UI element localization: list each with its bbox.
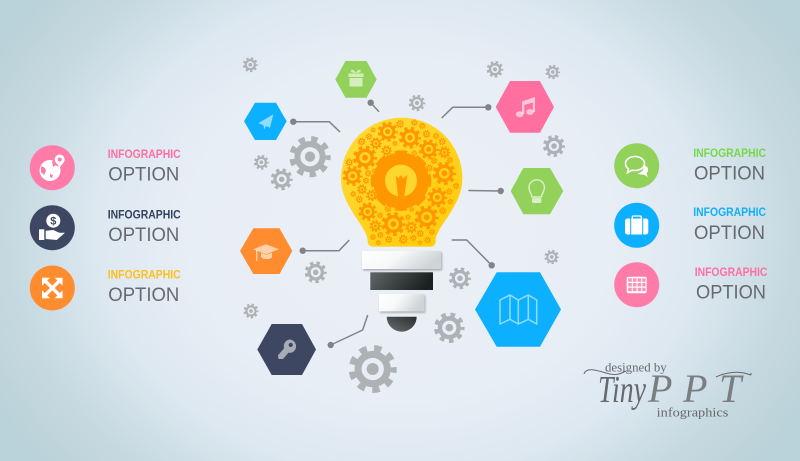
wordmark: designed by TinyPPT infographics: infographics (657, 405, 728, 420)
icon: key (278, 339, 296, 359)
icon: gift (348, 70, 364, 86)
icon: graduation cap (253, 244, 279, 261)
wordmark: designed by TinyPPT infographics: P (682, 366, 707, 411)
icon: hand and coin: $ (50, 216, 56, 228)
wordmark: designed by TinyPPT infographics (584, 360, 751, 420)
gray decorative gears (244, 58, 563, 390)
bulb glass with gears (341, 118, 462, 247)
right option 2 (614, 203, 766, 248)
label: OPTION (694, 222, 765, 244)
wordmark: designed by TinyPPT infographics: T (719, 366, 744, 411)
icon: chat bubbles (614, 143, 659, 188)
icon: globe and pin (30, 145, 75, 190)
label: INFOGRAPHIC (108, 149, 181, 161)
right option 1 (614, 143, 766, 188)
hexagon: graduation cap (240, 228, 292, 274)
label: INFOGRAPHIC (693, 207, 766, 219)
hexagon: light bulb (511, 168, 563, 214)
hexagon: key (257, 324, 316, 375)
label: OPTION (108, 164, 179, 186)
wordmark: designed by TinyPPT infographics: Tiny (598, 369, 646, 411)
hexagon: paper plane (244, 103, 287, 140)
right option 3 (614, 262, 767, 307)
label (693, 207, 766, 244)
hexagon: map (475, 272, 561, 347)
wordmark: designed by TinyPPT infographics: P (647, 366, 672, 411)
icon: hand and coin (30, 205, 75, 250)
connector lines (290, 100, 504, 348)
wordmark: designed by TinyPPT infographics: designed by (605, 360, 667, 374)
icon: plane (258, 114, 273, 129)
icon: bulb (529, 180, 544, 203)
label (108, 149, 181, 186)
hexagon: gift (335, 61, 377, 98)
icon: music note (516, 97, 535, 117)
label (108, 270, 181, 306)
label: OPTION (108, 284, 179, 306)
bulb base (362, 251, 441, 332)
label: INFOGRAPHIC (108, 209, 181, 221)
icon: table (614, 262, 659, 307)
light bulb (341, 118, 462, 332)
label (695, 267, 767, 304)
label: INFOGRAPHIC (695, 267, 767, 279)
icon: map (500, 295, 537, 324)
left option 1 (30, 145, 181, 190)
label: INFOGRAPHIC (108, 270, 181, 282)
central gear (374, 154, 428, 207)
label: INFOGRAPHIC (693, 148, 766, 160)
hexagon: music (496, 81, 554, 133)
icon: suitcase (614, 203, 659, 248)
icon: expand arrows (30, 266, 75, 310)
label: OPTION (108, 224, 179, 246)
left option 2 (30, 205, 181, 250)
label (108, 209, 181, 246)
left option 3 (30, 266, 181, 310)
label: OPTION (696, 282, 766, 304)
label: OPTION (694, 163, 765, 185)
label (693, 148, 766, 185)
